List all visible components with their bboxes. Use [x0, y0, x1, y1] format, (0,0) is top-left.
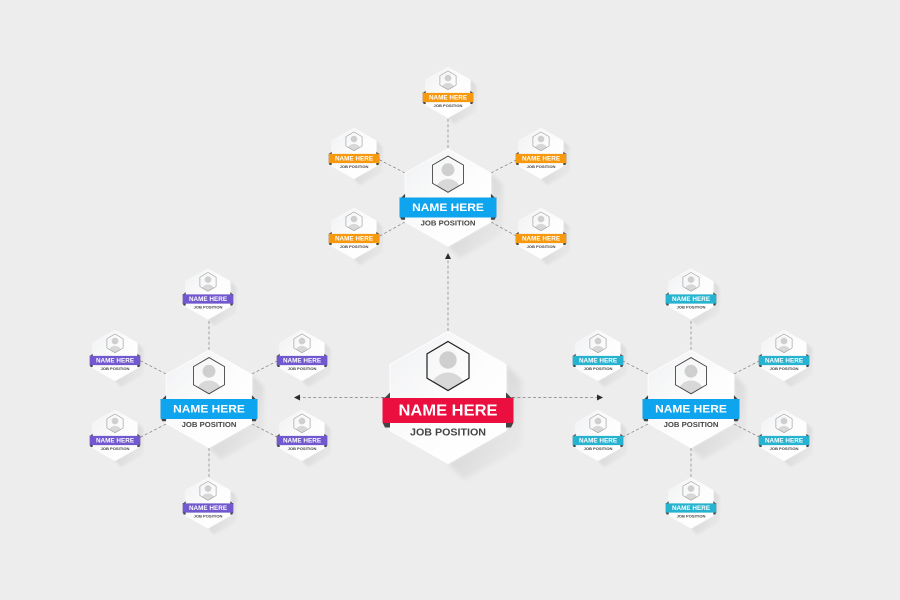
name: NAME HERE — [399, 402, 497, 419]
name: NAME HERE — [189, 297, 227, 303]
node: left team member, lower right — [277, 410, 330, 467]
name: NAME HERE — [655, 404, 727, 416]
name: NAME HERE — [765, 438, 803, 444]
red name ribbon — [382, 398, 514, 423]
purple ribbon — [183, 294, 233, 304]
name: NAME HERE — [765, 358, 803, 364]
node: left team member, upper right — [277, 330, 330, 387]
node: right team member, bottom — [666, 478, 719, 535]
job position: JOB POSITION — [664, 420, 719, 429]
job position: JOB POSITION — [101, 446, 130, 451]
job position: JOB POSITION — [584, 446, 613, 451]
teal ribbon — [573, 356, 623, 365]
teal ribbon — [666, 503, 716, 513]
purple ribbon — [183, 503, 233, 513]
node: main leader — [382, 332, 522, 480]
orange ribbon — [329, 234, 379, 243]
job position: JOB POSITION — [584, 366, 613, 371]
name: NAME HERE — [283, 438, 321, 444]
blue name ribbon — [161, 399, 257, 419]
node: right team member, lower left — [573, 410, 626, 467]
job position: JOB POSITION — [101, 366, 130, 371]
purple ribbon — [90, 356, 140, 365]
purple ribbon — [90, 436, 140, 445]
node: left team member, upper left — [90, 330, 143, 387]
node: left team lead — [161, 350, 264, 460]
name: NAME HERE — [96, 358, 134, 364]
orange ribbon — [516, 154, 566, 163]
name: NAME HERE — [283, 358, 321, 364]
job position: JOB POSITION — [527, 244, 556, 249]
name: NAME HERE — [173, 404, 245, 416]
job position: JOB POSITION — [770, 446, 799, 451]
name: NAME HERE — [522, 156, 560, 162]
name: NAME HERE — [412, 202, 484, 214]
job position: JOB POSITION — [288, 446, 317, 451]
teal ribbon — [759, 436, 809, 445]
job position: JOB POSITION — [194, 514, 223, 519]
name: NAME HERE — [96, 438, 134, 444]
job position: JOB POSITION — [340, 164, 369, 169]
node: right team member, top — [666, 269, 719, 326]
node: right team member, upper left — [573, 330, 626, 387]
arrow: left to left team — [294, 394, 389, 400]
job position: JOB POSITION — [770, 366, 799, 371]
teal ribbon — [759, 356, 809, 365]
arrow: right to right team — [507, 394, 603, 400]
name: NAME HERE — [335, 156, 373, 162]
job position: JOB POSITION — [340, 244, 369, 249]
node: top team lead — [400, 149, 503, 258]
teal ribbon — [573, 436, 623, 445]
name: NAME HERE — [335, 236, 373, 242]
job position: JOB POSITION — [182, 420, 237, 429]
job position: JOB POSITION — [434, 103, 463, 108]
job position: JOB POSITION — [288, 366, 317, 371]
node: top team member, upper left — [329, 128, 382, 185]
orange ribbon — [423, 93, 473, 102]
job position: JOB POSITION — [677, 514, 706, 519]
name: NAME HERE — [579, 438, 617, 444]
job position: JOB POSITION — [527, 164, 556, 169]
connector lines: right team — [621, 320, 761, 478]
orange ribbon — [329, 154, 379, 163]
purple ribbon — [277, 356, 327, 365]
node: top team member, lower left — [329, 208, 382, 265]
node: top team member, lower right — [516, 208, 569, 265]
blue name ribbon — [643, 399, 739, 419]
teal ribbon — [666, 294, 716, 304]
connector lines: top team — [378, 118, 518, 237]
purple ribbon — [277, 436, 327, 445]
node: right team member, lower right — [759, 410, 812, 467]
blue name ribbon — [400, 198, 496, 217]
job position: JOB POSITION — [677, 305, 706, 310]
name: NAME HERE — [429, 95, 467, 101]
connector lines: left team — [139, 320, 279, 478]
job position: JOB POSITION — [421, 219, 476, 228]
node: left team member, bottom — [183, 478, 236, 535]
job position: JOB POSITION — [410, 427, 486, 439]
node: left team member, top — [183, 269, 236, 326]
node: left team member, lower left — [90, 410, 143, 467]
orange ribbon — [516, 234, 566, 243]
name: NAME HERE — [522, 236, 560, 242]
name: NAME HERE — [672, 506, 710, 512]
arrow: up to top team — [445, 253, 451, 331]
job position: JOB POSITION — [194, 305, 223, 310]
name: NAME HERE — [672, 297, 710, 303]
name: NAME HERE — [189, 506, 227, 512]
name: NAME HERE — [579, 358, 617, 364]
node: right team lead — [643, 350, 746, 460]
node: top team member, upper right — [516, 128, 569, 185]
node: right team member, upper right — [759, 330, 812, 387]
node: top team member, top — [423, 67, 476, 124]
